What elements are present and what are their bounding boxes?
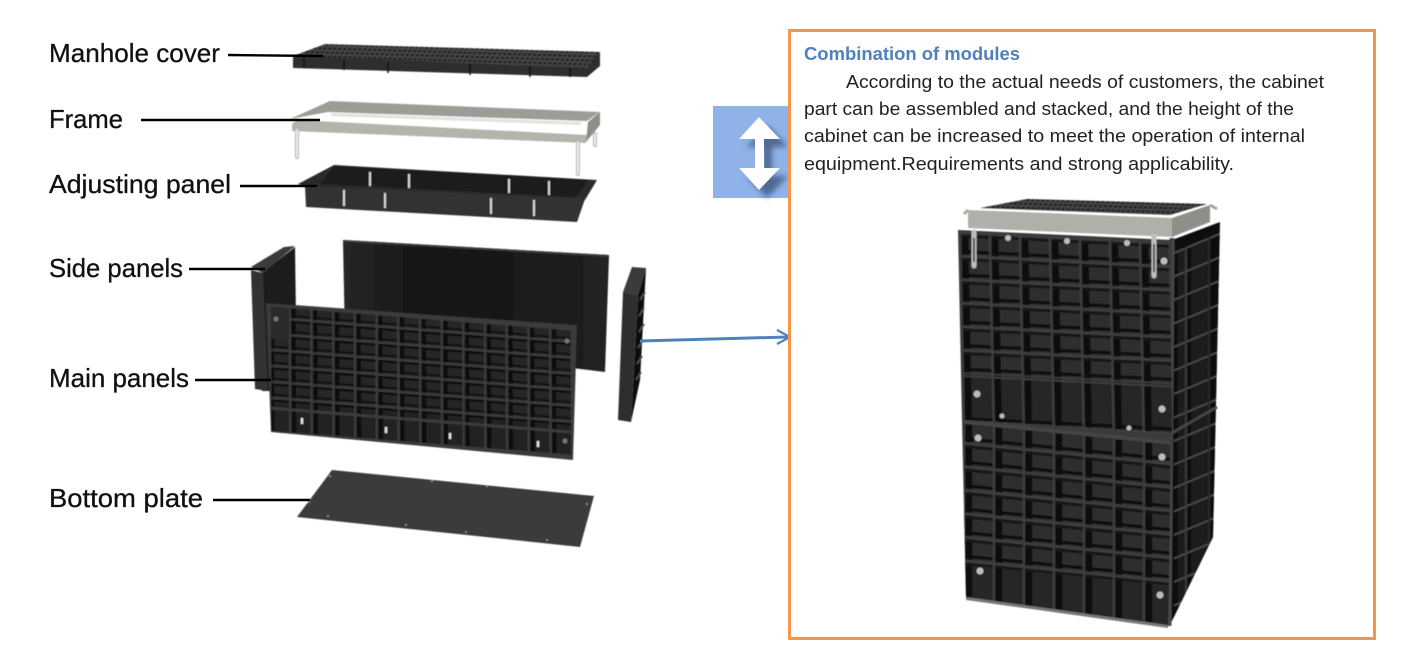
text block: equipment.Requirements and strong applicability. bbox=[804, 153, 1234, 174]
part: manhole cover bbox=[293, 44, 600, 77]
part: bottom plate bbox=[297, 470, 594, 547]
part: adjusting panel bbox=[298, 165, 597, 222]
text block: cabinet can be increased to meet the operation of internal bbox=[804, 125, 1305, 146]
text block: part can be assembled and stacked, and the height of the bbox=[804, 98, 1294, 119]
cover and frame bbox=[964, 199, 1217, 237]
part: front main panel bbox=[266, 303, 577, 460]
part: right side panel bbox=[618, 267, 646, 422]
text block: According to the actual needs of customers, the cabinet bbox=[846, 71, 1324, 92]
label: Main panels: Main panels bbox=[49, 363, 189, 393]
hooks and rivets bbox=[974, 232, 1168, 598]
label: Side panels: Side panels bbox=[49, 253, 183, 283]
part: back main panel bbox=[343, 240, 609, 372]
text block bbox=[804, 71, 1324, 174]
front lower module bbox=[962, 420, 1172, 634]
label: Adjusting panel: Adjusting panel bbox=[49, 169, 231, 199]
icon: vertical double arrow bbox=[713, 106, 790, 198]
part: frame bbox=[290, 101, 600, 174]
label: Manhole cover: Manhole cover bbox=[49, 38, 220, 68]
assembled stacked cabinet bbox=[958, 199, 1222, 652]
panel: combination of modules bbox=[790, 30, 1374, 652]
heading: Combination of modules bbox=[804, 44, 1020, 64]
part: left side panel bbox=[251, 246, 296, 391]
label: Frame: Frame bbox=[49, 104, 123, 134]
front upper module bbox=[958, 230, 1174, 433]
side face bbox=[1169, 222, 1222, 652]
arrow: parts to assembled module bbox=[640, 330, 790, 344]
label: Bottom plate: Bottom plate bbox=[49, 483, 203, 513]
exploded diagram bbox=[251, 44, 646, 547]
